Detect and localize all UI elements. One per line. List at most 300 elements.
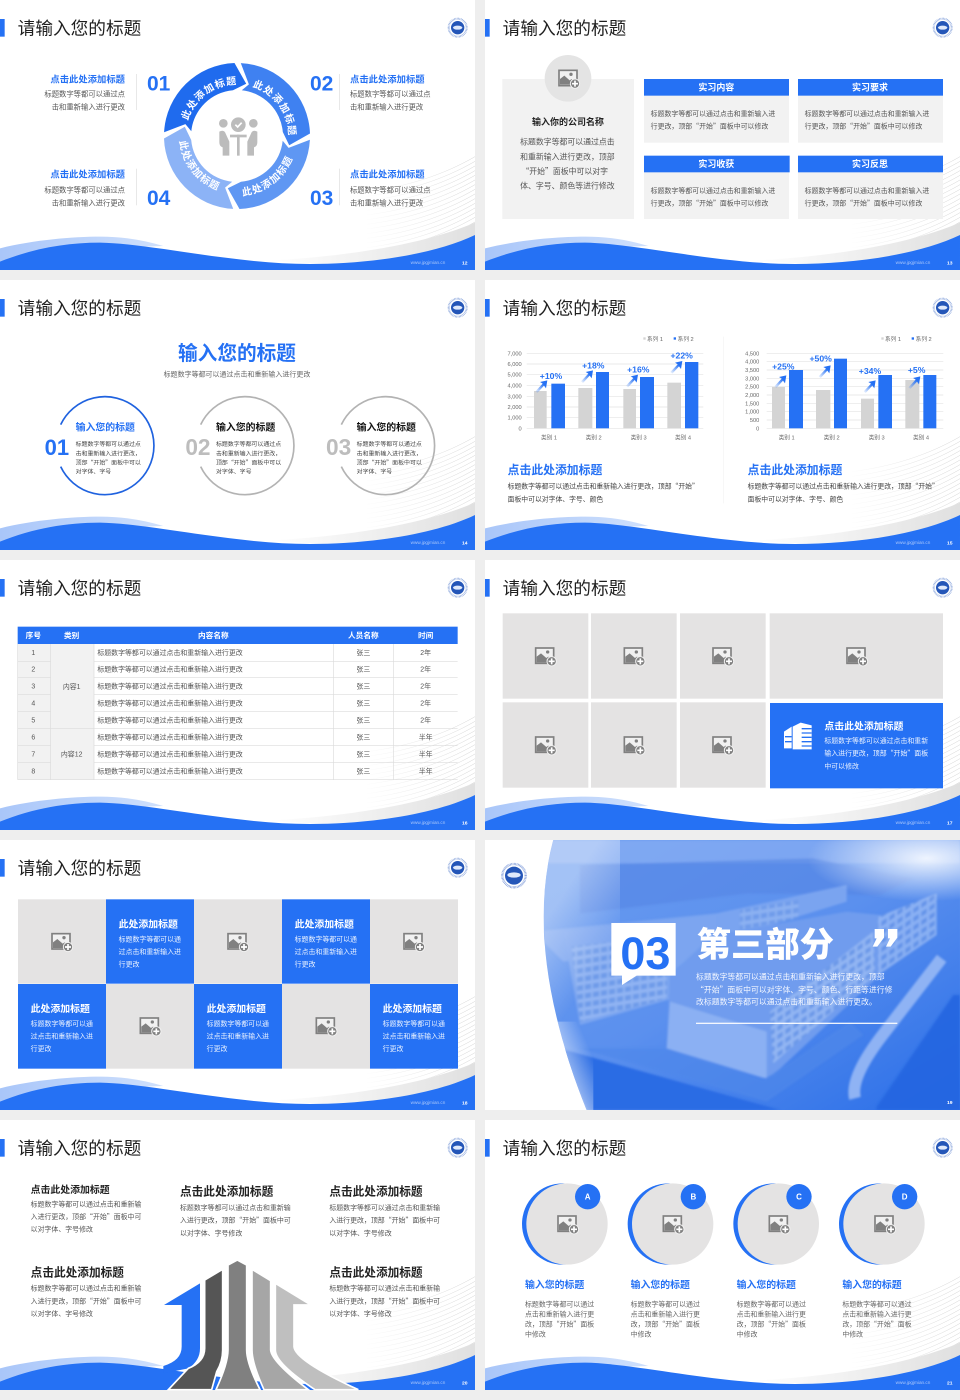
slide 19: section divider (485, 815, 960, 1110)
circle 03: 输入您的标题 (357, 421, 416, 434)
cycle ring: 此处添加标题 (178, 141, 220, 190)
left bar chart: +10% (540, 371, 562, 381)
text block bottom left: 入进行更改，顶部“开始”面板中可 (31, 1295, 141, 1305)
table body: 标题数字等都可以通过点击和重新输入进行更改 (97, 665, 243, 674)
icon: people with check (219, 117, 258, 156)
blue tile 5: 标题数字等都可以通 (383, 1018, 445, 1028)
text block top centre: 以对字体、字号修改 (180, 1227, 242, 1237)
item C: 中修改 (737, 1329, 758, 1339)
right bar chart: 2,000 (745, 393, 759, 399)
table body: 2年 (420, 665, 431, 674)
slide 18 footer: www.jpgjmian.cn (411, 1100, 446, 1105)
card: 实习内容: 行更改，顶部“开始”面板中可以修改 (651, 121, 768, 131)
item D: 改，顶部“开始”面板 (842, 1319, 912, 1329)
item C: 输入您的标题 (737, 1278, 796, 1291)
slide 20 footer (411, 1380, 468, 1386)
text block bottom right: 标题数字等都可以通过点击和重新输 (329, 1283, 440, 1293)
right bar chart: 类别 3 (869, 434, 885, 442)
centre heading: 输入您的标题 (178, 342, 296, 365)
right bar chart (745, 335, 943, 442)
circle 02: 标题数字等都可以通过点 (216, 439, 281, 448)
step 03: 点击此处添加标题 (350, 169, 425, 180)
right bar chart: +5% (908, 365, 926, 375)
cycle ring: 此处添加标题 (180, 76, 236, 120)
table header (26, 630, 434, 640)
item C: 标题数字等都可以通过 (737, 1299, 806, 1309)
left bar chart: 类别 3 (631, 434, 647, 442)
slide 20 title: 请输入您的标题 (18, 1138, 141, 1158)
icon: building (784, 723, 812, 749)
card: 实习收获 (644, 156, 790, 219)
left bar chart: 6,000 (508, 362, 522, 368)
left bar chart: 1,000 (508, 416, 522, 422)
left chart caption: 点击此处添加标题 (508, 463, 602, 477)
table body: 张三 (356, 733, 370, 742)
slide 18 title: 请输入您的标题 (18, 858, 141, 878)
circle 03: 击和重新输入进行更改， (357, 448, 422, 457)
left bar chart: 类别 4 (675, 434, 691, 442)
blue tile 4 (194, 984, 282, 1069)
item A: 中修改 (525, 1329, 546, 1339)
left chart caption: 标题数字等都可以通过点击和重新输入进行更改，顶部“开始” (508, 480, 699, 490)
company panel: 体、字号、颜色等进行修改 (520, 181, 615, 192)
table (18, 627, 458, 780)
left bar chart (508, 335, 703, 442)
section description (696, 971, 893, 1008)
text block top left: 标题数字等都可以通过点击和重新输 (31, 1198, 141, 1208)
arrows converging upward (163, 1260, 358, 1390)
right bar chart: 500 (750, 418, 759, 424)
number callout (611, 923, 676, 985)
card: 实习要求 (798, 79, 943, 143)
blue tile 3 (18, 984, 106, 1069)
blue tile 1: 标题数字等都可以通 (119, 933, 181, 943)
card: 实习内容: 标题数字等都可以通过点击和重新输入进 (651, 108, 775, 118)
left bar chart: 3,000 (508, 394, 522, 400)
text block bottom left: 以对字体、字号修改 (31, 1308, 93, 1318)
blue text card: 输入进行更改，顶部“开始”面板 (824, 748, 928, 758)
table body: 2年 (420, 699, 431, 708)
slide 15 footer: www.jpgjmian.cn (896, 540, 931, 545)
card: 实习收获: 行更改，顶部“开始”面板中可以修改 (651, 198, 768, 208)
company panel: 标题数字等都可以通过点击 (520, 137, 615, 148)
text block top centre: 点击此处添加标题 (180, 1185, 274, 1199)
table body: 2 (31, 667, 35, 674)
text block top left (31, 1183, 141, 1234)
left bar chart: 4,000 (508, 384, 522, 390)
blue text card: 标题数字等都可以通过点击和重新 (824, 735, 928, 745)
card: 实习要求: 实习要求 (852, 81, 888, 92)
circle 01: 对字体、字号 (76, 467, 111, 476)
table body: 5 (31, 718, 35, 725)
circle 02: 输入您的标题 (216, 421, 275, 434)
text block top right (329, 1185, 440, 1237)
number callout: 03 (620, 928, 670, 979)
blue tile 3: 过点击和重新输入进 (31, 1031, 93, 1041)
left chart caption: 面板中可以对字体、字号、颜色 (508, 494, 603, 504)
circle 03 (326, 397, 435, 495)
slide 16 footer: 16 (462, 820, 468, 826)
item C: 改，顶部“开始”面板 (737, 1319, 806, 1329)
slide 14 footer (411, 540, 468, 546)
table body: 半年 (419, 767, 433, 776)
table body: 8 (31, 769, 35, 776)
item C: C (796, 1193, 802, 1202)
slide 17 footer: www.jpgjmian.cn (896, 820, 931, 825)
step 01: 标题数字等都可以通过点 (44, 90, 125, 99)
step 04 (44, 169, 171, 210)
logo (502, 864, 526, 887)
card: 实习内容: 实习内容 (698, 81, 734, 92)
blue text card (770, 703, 943, 788)
blue tile 3: 行更改 (31, 1043, 52, 1053)
item B: 输入您的标题 (631, 1278, 690, 1291)
cycle ring: 此处添加标题 (252, 80, 297, 136)
text block bottom left (31, 1265, 141, 1318)
item D: 标题数字等都可以通过 (842, 1299, 912, 1309)
table body: 内容1 (63, 682, 81, 691)
table body: 张三 (356, 767, 370, 776)
blue text card: 中可以修改 (824, 760, 859, 770)
right bar chart: 系列 2 (916, 335, 932, 343)
slide 17 footer (896, 820, 953, 826)
text block top left: 以对字体、字号修改 (31, 1224, 93, 1234)
step 02 (310, 73, 431, 112)
slide 12 footer: 12 (462, 260, 468, 266)
blue tile 2: 标题数字等都可以通 (295, 933, 357, 943)
item D: 输入您的标题 (842, 1278, 902, 1291)
item B (628, 1183, 713, 1339)
blue tile 5 (370, 984, 458, 1069)
step 03: 03 (310, 187, 333, 210)
blue tile 4: 行更改 (207, 1043, 228, 1053)
item A: 输入您的标题 (525, 1278, 584, 1291)
item B: 标题数字等都可以通过 (631, 1299, 700, 1309)
item A: 标题数字等都可以通过 (525, 1299, 594, 1309)
right chart caption: 标题数字等都可以通过点击和重新输入进行更改，顶部“开始” (748, 480, 939, 490)
blue tile 1: 过点击和重新输入进 (119, 946, 181, 956)
slide 12 footer (411, 260, 468, 266)
left bar chart: 系列 2 (678, 335, 694, 343)
card: 实习反思: 行更改，顶部“开始”面板中可以修改 (805, 198, 922, 208)
text block top right: 点击此处添加标题 (329, 1185, 423, 1199)
circle 01: 01 (45, 435, 69, 460)
slide 18 footer (411, 1100, 468, 1106)
table body: 标题数字等都可以通过点击和重新输入进行更改 (97, 767, 243, 776)
step 01: 击和重新输入进行更改 (52, 103, 126, 112)
step 01 (44, 73, 171, 112)
circle 02: 击和重新输入进行更改， (216, 448, 281, 457)
slide 21: four circles A–D (485, 1120, 960, 1390)
step 01: 01 (147, 73, 171, 96)
step 04: 04 (147, 187, 171, 210)
section heading: 第三部分 (697, 926, 834, 964)
blue tile 3: 标题数字等都可以通 (31, 1018, 93, 1028)
card: 实习收获: 标题数字等都可以通过点击和重新输入进 (651, 185, 775, 195)
left bar chart: +18% (582, 361, 605, 371)
circle 01: 标题数字等都可以通过点 (76, 439, 141, 448)
circle 02: 02 (185, 434, 211, 460)
company panel: 输入你的公司名称 (532, 116, 604, 127)
blue tile 1: 此处添加标题 (119, 917, 178, 930)
slide 13 footer (896, 260, 953, 266)
text block top centre: 入进行更改，顶部“开始”面板中可 (180, 1215, 291, 1225)
right chart caption: 点击此处添加标题 (748, 463, 842, 477)
blue tile 4: 标题数字等都可以通 (207, 1018, 269, 1028)
item A (522, 1183, 608, 1339)
right bar chart: +34% (859, 366, 881, 376)
right bar chart: 3,500 (745, 368, 759, 374)
slide 13 footer: www.jpgjmian.cn (896, 260, 931, 265)
image placeholders (503, 613, 943, 788)
item D: D (902, 1193, 908, 1202)
item C (733, 1183, 819, 1339)
left bar chart: +22% (670, 350, 693, 360)
blue tile 2 (282, 899, 370, 984)
left bar chart: 0 (519, 426, 522, 432)
right bar chart: 2,500 (745, 385, 759, 391)
card: 实习反思: 标题数字等都可以通过点击和重新输入进 (805, 185, 929, 195)
text block top left: 入进行更改，顶部“开始”面板中可 (31, 1211, 141, 1221)
item D: 中修改 (842, 1329, 863, 1339)
circle 03: 对字体、字号 (357, 467, 392, 476)
item A: 改，顶部“开始”面板 (525, 1319, 594, 1329)
table body: 半年 (419, 750, 433, 759)
table body: 2年 (420, 648, 431, 657)
circle 01: 击和重新输入进行更改， (76, 448, 141, 457)
slide 12 title: 请输入您的标题 (18, 18, 141, 38)
table body: 张三 (356, 665, 370, 674)
right bar chart: 3,000 (745, 376, 759, 382)
step 02: 标题数字等都可以通过点 (350, 90, 431, 99)
right bar chart: 4,500 (745, 351, 759, 357)
blue tile 5: 过点击和重新输入进 (383, 1031, 445, 1041)
text block bottom left: 标题数字等都可以通过点击和重新输 (31, 1283, 141, 1293)
table body: 标题数字等都可以通过点击和重新输入进行更改 (97, 750, 243, 759)
table body: 标题数字等都可以通过点击和重新输入进行更改 (97, 648, 243, 657)
item A: A (585, 1193, 591, 1202)
right bar chart: 类别 1 (779, 434, 795, 442)
step 04: 标题数字等都可以通过点 (44, 185, 125, 194)
table header: 序号 (26, 630, 41, 640)
circle 01: 顶部“开始”面板中可以 (76, 458, 141, 467)
right bar chart: 类别 2 (824, 434, 840, 442)
card: 实习收获: 实习收获 (698, 158, 734, 169)
slide 21 title: 请输入您的标题 (503, 1138, 626, 1158)
photo: campus buildings tinted blue (513, 815, 960, 1110)
table body: 张三 (356, 648, 370, 657)
item B: 改，顶部“开始”面板 (631, 1319, 700, 1329)
step 01: 点击此处添加标题 (50, 73, 126, 84)
item D (839, 1183, 925, 1339)
blue tile 2: 此处添加标题 (295, 917, 354, 930)
blue tile 4: 过点击和重新输入进 (207, 1031, 269, 1041)
right bar chart: 1,000 (745, 410, 759, 416)
slide 20: arrows with text blocks (0, 1120, 475, 1390)
text block top right: 以对字体、字号修改 (329, 1227, 392, 1237)
gray image tiles (18, 899, 458, 1069)
blue tile 4: 此处添加标题 (207, 1002, 266, 1015)
circle 03: 标题数字等都可以通过点 (357, 439, 422, 448)
circle 03: 顶部“开始”面板中可以 (357, 458, 422, 467)
text block bottom left: 点击此处添加标题 (31, 1265, 124, 1279)
slide 13: company panel with four cards (485, 0, 960, 270)
section description: “开始”面板中可以对字体、字号、颜色、行距等进行修 (696, 984, 893, 995)
company panel: 和重新输入进行更改，顶部 (520, 151, 615, 162)
left chart caption (508, 463, 699, 504)
table body: 半年 (419, 733, 433, 742)
item B: 点击和重新输入进行更 (631, 1309, 700, 1319)
card: 实习反思 (798, 156, 943, 219)
slide 16 title: 请输入您的标题 (18, 578, 141, 598)
card: 实习要求: 标题数字等都可以通过点击和重新输入进 (805, 108, 929, 118)
slide 16: data table (0, 560, 475, 830)
text block top right: 入进行更改，顶部“开始”面板中可 (329, 1215, 440, 1225)
item D: 点击和重新输入进行更 (842, 1309, 912, 1319)
right bar chart: 0 (756, 426, 759, 432)
slide 17 footer: 17 (947, 820, 953, 826)
left bar chart: 系列 1 (647, 335, 663, 343)
table body: 2年 (420, 682, 431, 691)
blue tile 5: 此处添加标题 (383, 1002, 442, 1015)
company panel (502, 55, 634, 219)
cycle ring: 此处添加标题 (242, 156, 293, 197)
table header: 人员名称 (348, 630, 379, 640)
step 02: 击和重新输入进行更改 (350, 103, 424, 112)
circle 02: 对字体、字号 (216, 467, 252, 476)
centre heading: 标题数字等都可以通过点击和重新输入进行更改 (164, 369, 310, 378)
slide 13 footer: 13 (947, 260, 953, 266)
table body: 张三 (356, 750, 370, 759)
circle 01: 输入您的标题 (76, 421, 135, 434)
circle 03: 03 (326, 434, 351, 460)
slide 15 footer: 15 (947, 540, 953, 546)
step 04: 点击此处添加标题 (50, 169, 126, 180)
slide 16 footer (411, 820, 468, 826)
right bar chart: 4,000 (745, 360, 759, 366)
cycle ring (164, 63, 310, 209)
slide 12 footer: www.jpgjmian.cn (411, 260, 446, 265)
card: 实习反思: 实习反思 (852, 158, 888, 169)
right chart caption: 面板中可以对字体、字号、颜色 (748, 494, 843, 504)
slide 20 footer: 20 (462, 1380, 468, 1386)
blue tile 5: 行更改 (383, 1043, 404, 1053)
page number: 19 (947, 1100, 953, 1106)
left bar chart: 2,000 (508, 405, 522, 411)
table body: 张三 (356, 716, 370, 725)
card: 实习要求: 行更改，顶部“开始”面板中可以修改 (805, 121, 922, 131)
blue tile 2: 行更改 (295, 958, 316, 968)
slide 21 footer (896, 1380, 953, 1386)
step 03 (310, 169, 431, 210)
blue tile 1 (106, 899, 194, 984)
table body: 2年 (420, 716, 431, 725)
table header: 时间 (418, 630, 434, 640)
slide 18 footer: 18 (462, 1100, 468, 1106)
right chart caption (748, 463, 939, 504)
slide 20 footer: www.jpgjmian.cn (411, 1380, 446, 1385)
table body: 7 (31, 752, 35, 759)
table body: 3 (31, 684, 35, 691)
right bar chart: +25% (772, 362, 795, 372)
table body: 内容12 (61, 750, 83, 759)
item B: 中修改 (631, 1329, 652, 1339)
right bar chart: 系列 1 (885, 335, 901, 343)
left bar chart: 7,000 (508, 351, 522, 357)
right bar chart: +50% (809, 354, 832, 364)
right bar chart: 类别 4 (913, 434, 929, 442)
text block top centre (180, 1185, 291, 1237)
company panel: “开始”面板中可以对字 (521, 166, 608, 177)
text block bottom right: 以对字体、字号修改 (329, 1308, 392, 1318)
table body: 张三 (356, 682, 370, 691)
circle 02 (185, 397, 294, 495)
slide 21 footer: www.jpgjmian.cn (896, 1380, 931, 1385)
text block bottom right: 入进行更改，顶部“开始”面板中可 (329, 1295, 440, 1305)
table body: 标题数字等都可以通过点击和重新输入进行更改 (97, 733, 243, 742)
text block bottom right: 点击此处添加标题 (329, 1265, 423, 1279)
slide 15 title: 请输入您的标题 (503, 298, 626, 318)
circle 01 (45, 397, 154, 495)
slide 15: two bar charts (485, 280, 960, 550)
table body: 标题数字等都可以通过点击和重新输入进行更改 (97, 699, 243, 708)
table body: 标题数字等都可以通过点击和重新输入进行更改 (97, 716, 243, 725)
text block top right: 标题数字等都可以通过点击和重新输 (329, 1202, 440, 1212)
step 03: 标题数字等都可以通过点 (350, 185, 431, 194)
table body: 1 (31, 650, 35, 657)
blue tile 2: 过点击和重新输入进 (295, 946, 357, 956)
section description: 改标题数字等都可以通过点击和重新输入进行更改。 (696, 997, 877, 1008)
slide 15 footer (896, 540, 953, 546)
left bar chart: 类别 1 (541, 434, 557, 442)
slide 16 footer: www.jpgjmian.cn (411, 820, 446, 825)
slide 18: checkerboard (0, 840, 475, 1110)
left bar chart: 类别 2 (586, 434, 602, 442)
right bar chart: 1,500 (745, 401, 759, 407)
step 02: 点击此处添加标题 (350, 73, 425, 84)
slide 14 title: 请输入您的标题 (18, 298, 141, 318)
slide 21 footer: 21 (947, 1380, 953, 1386)
centre heading (164, 342, 310, 378)
quote mark (873, 929, 897, 947)
item B: B (690, 1193, 696, 1202)
slide 13 title: 请输入您的标题 (503, 18, 626, 38)
item A: 点击和重新输入进行更 (525, 1309, 594, 1319)
text block top centre: 标题数字等都可以通过点击和重新输 (180, 1202, 291, 1212)
slide 17 title: 请输入您的标题 (503, 578, 626, 598)
table body: 4 (31, 701, 35, 708)
text block top left: 点击此处添加标题 (31, 1183, 110, 1196)
section description: 标题数字等都可以通过点击和重新输入进行更改，顶部 (696, 971, 885, 982)
slide 14 footer: www.jpgjmian.cn (411, 540, 446, 545)
table body: 6 (31, 735, 35, 742)
slide 17: image grid (485, 560, 960, 830)
slide 12: circular four-step process (0, 0, 475, 270)
blue tile 1: 行更改 (119, 958, 140, 968)
blue text card: 点击此处添加标题 (824, 719, 903, 732)
slide 14: three circles (0, 280, 475, 550)
step 03: 击和重新输入进行更改 (350, 198, 424, 207)
step 04: 击和重新输入进行更改 (52, 198, 126, 207)
left bar chart: +16% (627, 364, 650, 374)
card: 实习内容 (644, 79, 789, 143)
text block bottom right (329, 1265, 440, 1318)
slide 14 footer: 14 (462, 540, 468, 546)
table body (31, 648, 433, 776)
table header: 内容名称 (198, 630, 229, 640)
blue tile 3: 此处添加标题 (31, 1002, 90, 1015)
left bar chart: 5,000 (508, 373, 522, 379)
